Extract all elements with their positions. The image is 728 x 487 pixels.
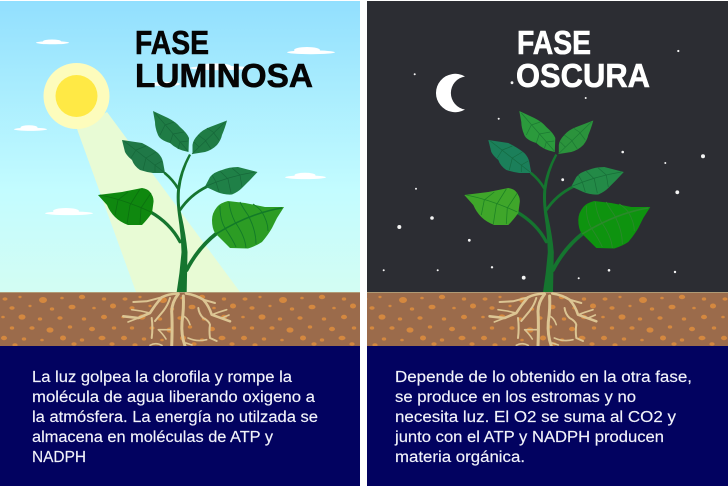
title: fase luminosa <box>135 24 313 94</box>
soil <box>0 292 360 347</box>
text panel: descripción oscura: se produce en los estromas y no <box>395 389 636 406</box>
panel: fase oscura <box>367 1 728 486</box>
roots <box>123 294 230 346</box>
light beam <box>77 112 240 292</box>
text panel: descripción luminosa: La luz golpea la clorofila y rompe la <box>32 369 292 386</box>
title: fase luminosa: FASE <box>135 24 209 61</box>
text panel: descripción oscura: junto con el ATP y NADPH producen <box>394 429 664 446</box>
roots <box>490 294 596 346</box>
text panel: descripción oscura: materia orgánica. <box>395 449 525 466</box>
title: fase oscura: FASE <box>517 24 591 61</box>
title: fase luminosa: LUMINOSA <box>135 57 313 94</box>
panel: fase luminosa <box>0 1 360 486</box>
text panel: descripción luminosa: almacena en moléculas de ATP y <box>32 429 273 446</box>
clouds <box>14 40 335 215</box>
icon: moon <box>436 74 465 112</box>
stars <box>383 50 705 280</box>
night background <box>367 1 728 293</box>
plant: day <box>98 111 284 292</box>
text panel: descripción luminosa: la atmósfera. La energía no utilzada se <box>32 409 318 426</box>
title: fase oscura: OSCURA <box>516 57 650 94</box>
icon: sun <box>44 63 110 129</box>
text panel: descripción oscura: Depende de lo obtenido en la otra fase, <box>395 369 692 386</box>
text panel: descripción luminosa <box>0 346 360 486</box>
text panel: descripción luminosa: molécula de agua liberando oxigeno a <box>32 389 315 406</box>
sky background <box>0 1 360 293</box>
plant: night <box>464 111 650 292</box>
text panel: descripción luminosa: NADPH <box>32 449 86 466</box>
title: fase oscura <box>516 24 650 94</box>
text panel: descripción oscura <box>367 346 728 486</box>
text panel: descripción oscura: necesita luz. El O2 se suma al CO2 y <box>395 409 676 426</box>
soil <box>367 292 728 347</box>
